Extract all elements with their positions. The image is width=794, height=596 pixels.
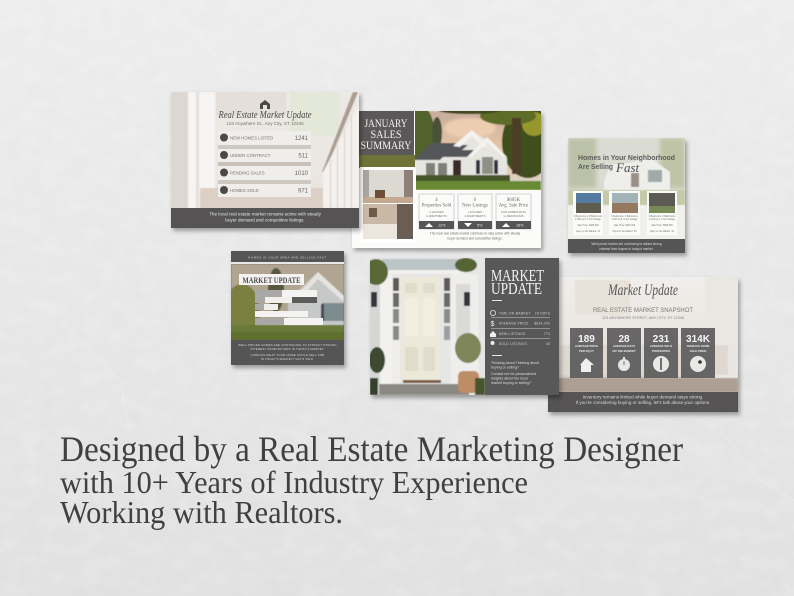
stat tiles: 314K xyxy=(686,334,711,345)
listing cards: 2,100 sq ft, 2 Car Garage xyxy=(649,218,676,221)
stat tiles: 189 xyxy=(578,334,595,345)
stat boxes xyxy=(419,194,531,229)
listing cards: Days on the Market: 28 xyxy=(613,230,637,233)
prompt text: buying or selling? xyxy=(491,366,519,370)
listing cards: Sale Price: $452,000 xyxy=(614,224,636,227)
panel: market snapshot card xyxy=(548,277,738,412)
metric rows: 45 xyxy=(546,342,550,346)
snapshot heading: REAL ESTATE MARKET SNAPSHOT xyxy=(593,307,693,314)
stat boxes: FOR HOMES WITH xyxy=(501,210,526,214)
icon: house xyxy=(260,100,270,109)
address: 123 Anywhere St., Any City, ST 12345 xyxy=(226,121,304,126)
stat boxes: 18% xyxy=(516,224,524,228)
listing cards: 3 Bedrooms, 2 Bathrooms xyxy=(611,215,639,218)
listing cards: Days on the Market: 10 xyxy=(650,230,675,233)
summary note: buyer demand and competitive listings. xyxy=(447,236,503,240)
metric rows: NEW LISTINGS xyxy=(499,332,525,336)
stat boxes: 6 xyxy=(474,198,477,203)
inset interior photos xyxy=(360,167,416,242)
stat tiles: PROPERTIES xyxy=(652,349,670,353)
prompt text xyxy=(491,361,539,385)
metric rows: AVERAGE PRICE xyxy=(499,322,529,326)
headline: with 10+ Years of Industry Experience xyxy=(60,464,528,500)
listing cards: 1,640 sq ft, 2 Car Garage xyxy=(612,218,638,221)
dark caption text xyxy=(238,343,337,361)
stat tiles: PER SQ FT xyxy=(579,349,594,353)
metric rows: 774 xyxy=(544,332,550,336)
stat tiles xyxy=(570,328,715,378)
market update label xyxy=(239,274,304,285)
panel: front door market update card xyxy=(364,258,559,395)
script title: Market Update xyxy=(607,282,678,299)
dark side panel xyxy=(485,258,559,395)
stat rows: HOMES SOLD xyxy=(230,188,259,193)
title text xyxy=(360,118,412,152)
dark footer band xyxy=(171,208,359,228)
footer text: The local real estate market remains active with steady xyxy=(209,212,322,217)
footer text: Inventory remains limited while buyer demand stays strong. xyxy=(583,394,703,400)
dark caption text: WELL-PRICED HOMES ARE CONTINUING TO ATTRACT STRONG xyxy=(238,343,337,347)
stat bars xyxy=(255,290,323,325)
stat tiles: 231 xyxy=(653,334,670,345)
title box xyxy=(359,111,414,155)
summary note: The local real estate market continues to stay active with steady xyxy=(430,232,520,236)
stat tiles: SALE PRICE xyxy=(690,349,707,353)
stat rows: NEW HOMES LISTED xyxy=(230,136,273,140)
listing cards: 4 Bedrooms, 3 Bathrooms xyxy=(649,215,676,218)
headline: Working with Realtors. xyxy=(60,494,343,530)
stat rows: 1010 xyxy=(295,171,309,177)
title text: SALES xyxy=(370,129,402,141)
panel: real estate market update card: buyer demand and competitive listings. xyxy=(225,218,305,223)
stat boxes: 4 xyxy=(435,198,438,203)
stat rows: PENDING SALES xyxy=(230,170,265,176)
dark caption text: CURIOUS WHAT YOUR HOME COULD SELL FOR xyxy=(251,353,324,357)
dark footer band xyxy=(568,239,685,253)
title text: SUMMARY xyxy=(360,140,412,152)
stat boxes: New Listings xyxy=(462,204,488,208)
listing cards: Sale Price: $485,000 xyxy=(577,224,599,227)
faded house background xyxy=(568,138,685,205)
panel title xyxy=(491,266,544,298)
panel: homes in your neighborhood card: interest from buyers in today's market. xyxy=(600,247,654,251)
stat boxes: 3+ BEDROOMS xyxy=(503,214,524,218)
stat boxes: Avg. Sale Price xyxy=(499,204,528,208)
stat tiles: ON THE MARKET xyxy=(612,349,636,353)
stat boxes: 3 HOUSES xyxy=(429,210,444,214)
panel: homes in your neighborhood card xyxy=(568,138,685,253)
stat boxes: 5% xyxy=(477,224,483,228)
metric rows: $ xyxy=(490,321,495,328)
summary note xyxy=(430,232,520,240)
footer text: Well-priced homes are continuing to attract strong xyxy=(591,242,662,246)
door photo xyxy=(364,258,485,395)
stat boxes: 4 APARTMENTS xyxy=(464,214,486,218)
stat boxes: 2 HOUSES xyxy=(468,210,482,214)
metric rows: SOLD LISTINGS xyxy=(499,342,527,346)
metric rows: 15 DAYS xyxy=(535,312,550,316)
top banner text: HOMES IN YOUR AREA ARE SELLING FAST xyxy=(248,256,327,260)
stat tiles: AVERAGE PRICE xyxy=(575,344,598,348)
panel: homes in your neighborhood card: Are Selling xyxy=(578,162,613,171)
metric rows: $824,000 xyxy=(534,322,550,326)
stat boxes: 12% xyxy=(438,224,446,228)
listing cards: Sale Price: $598,000 xyxy=(651,224,673,227)
stat tiles: 28 xyxy=(618,334,630,345)
heading: Homes in Your Neighborhood xyxy=(578,153,675,162)
metric rows xyxy=(490,310,550,346)
script word: Fast xyxy=(615,160,640,175)
panel: market update square card xyxy=(224,251,344,365)
stat rows: UNDER CONTRACT xyxy=(230,153,271,158)
listing cards: Days on the Market: 14 xyxy=(576,230,601,233)
headline xyxy=(60,429,683,530)
listing cards: 1,850 sq ft, 2 Car Garage xyxy=(575,218,602,221)
snapshot address: 123 ANYWHERE STREET, ANY CITY, ST 12345 xyxy=(602,316,684,320)
stat tiles: AVERAGE DAYS xyxy=(613,344,635,348)
prompt text: insights about the local xyxy=(491,376,528,380)
metric rows: TIME ON MARKET xyxy=(499,312,531,316)
house photo xyxy=(415,111,541,190)
stat rows: 511 xyxy=(298,154,309,160)
stat rows xyxy=(218,131,311,197)
dark footer band xyxy=(548,392,738,412)
stat tiles: AVERAGE HOME xyxy=(687,344,710,348)
prompt text: market buying or selling? xyxy=(491,381,531,385)
dark caption text: IN TODAY'S MARKET? LET'S TALK. xyxy=(261,357,314,361)
panel: January sales summary card xyxy=(352,106,554,248)
dark caption text: INTEREST FROM BUYERS IN TODAY'S MARKET. xyxy=(250,347,324,351)
title text: JANUARY xyxy=(364,118,408,130)
stat boxes: $605K xyxy=(507,198,521,203)
prompt text: Contact me for personalized xyxy=(491,372,536,376)
panel: real estate market update card xyxy=(171,92,359,228)
stat rows: 971 xyxy=(298,188,309,194)
stat boxes: 1 APARTMENTS xyxy=(426,214,447,218)
prompt text: Thinking about Thinking about xyxy=(491,361,539,365)
panel title: UPDATE xyxy=(491,279,542,298)
listing cards: 3 Bedrooms, 2.5 Bathrooms xyxy=(574,215,603,218)
house photo xyxy=(224,264,344,340)
stat tiles: AVERAGE SOLD xyxy=(650,344,672,348)
card title: Real Estate Market Update xyxy=(218,110,312,121)
listing cards xyxy=(573,191,677,235)
panel: market snapshot card: If you're considering buying or selling, let's talk about your options. xyxy=(576,400,710,405)
stat boxes: Properties Sold xyxy=(422,204,452,208)
panel: market update square card: MARKET UPDATE xyxy=(242,276,300,285)
stat rows: 1241 xyxy=(295,136,309,142)
panel title: MARKET xyxy=(491,266,544,285)
headline: Designed by a Real Estate Marketing Designer xyxy=(60,429,683,469)
